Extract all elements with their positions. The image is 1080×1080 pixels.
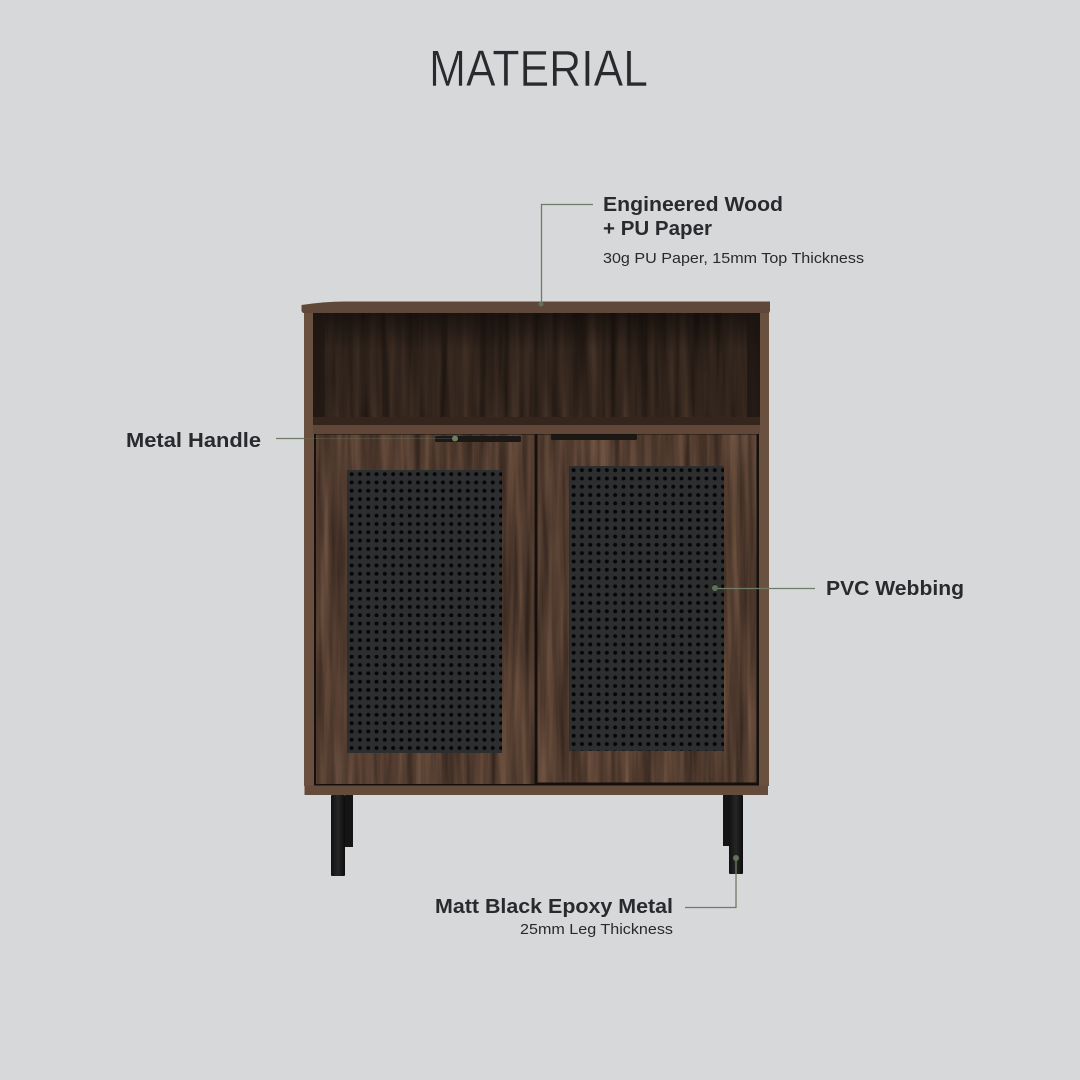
right door bbox=[538, 434, 756, 782]
marker dot: webbing bbox=[712, 585, 718, 591]
leader line: leg bbox=[685, 859, 736, 908]
label: PVC webbing: PVC Webbing bbox=[826, 578, 964, 600]
callout: matt black epoxy metal bbox=[435, 855, 739, 938]
legs: right pair bbox=[723, 795, 743, 874]
label: engineered wood: Engineered Wood bbox=[603, 194, 783, 216]
furniture: cabinet bbox=[302, 302, 770, 876]
callout: PVC webbing bbox=[712, 578, 964, 600]
label: PU paper: + PU Paper bbox=[603, 218, 712, 240]
rattan mesh left bbox=[347, 470, 502, 753]
faint line across door bbox=[304, 438, 455, 440]
right side panel bbox=[759, 313, 769, 786]
leader line: handle bbox=[276, 438, 304, 440]
legs: left pair bbox=[331, 795, 353, 876]
open shelf niche bbox=[313, 313, 760, 425]
right handle bbox=[551, 434, 637, 440]
marker dot: handle bbox=[452, 436, 458, 442]
marker dot: top board bbox=[538, 302, 544, 306]
cabinet backing bbox=[306, 313, 766, 786]
top board bbox=[302, 302, 770, 313]
left handle bbox=[435, 436, 521, 442]
left door bbox=[316, 434, 534, 784]
shelf front edge bbox=[313, 425, 760, 434]
marker dot: leg bbox=[733, 855, 739, 861]
callout: engineered wood bbox=[538, 194, 864, 306]
rattan mesh right bbox=[569, 466, 724, 751]
label: matt black epoxy metal: Matt Black Epoxy Metal bbox=[435, 896, 673, 918]
leader line: top board bbox=[542, 204, 593, 304]
detail: top thickness: 30g PU Paper, 15mm Top Thickness bbox=[603, 251, 864, 267]
label: metal handle: Metal Handle bbox=[126, 430, 261, 452]
leader line: webbing bbox=[715, 588, 815, 590]
callout: metal handle bbox=[126, 430, 458, 452]
title: MATERIAL bbox=[429, 40, 648, 97]
detail: leg thickness: 25mm Leg Thickness bbox=[520, 922, 673, 938]
left side panel bbox=[304, 313, 314, 786]
bottom board bbox=[304, 786, 768, 795]
